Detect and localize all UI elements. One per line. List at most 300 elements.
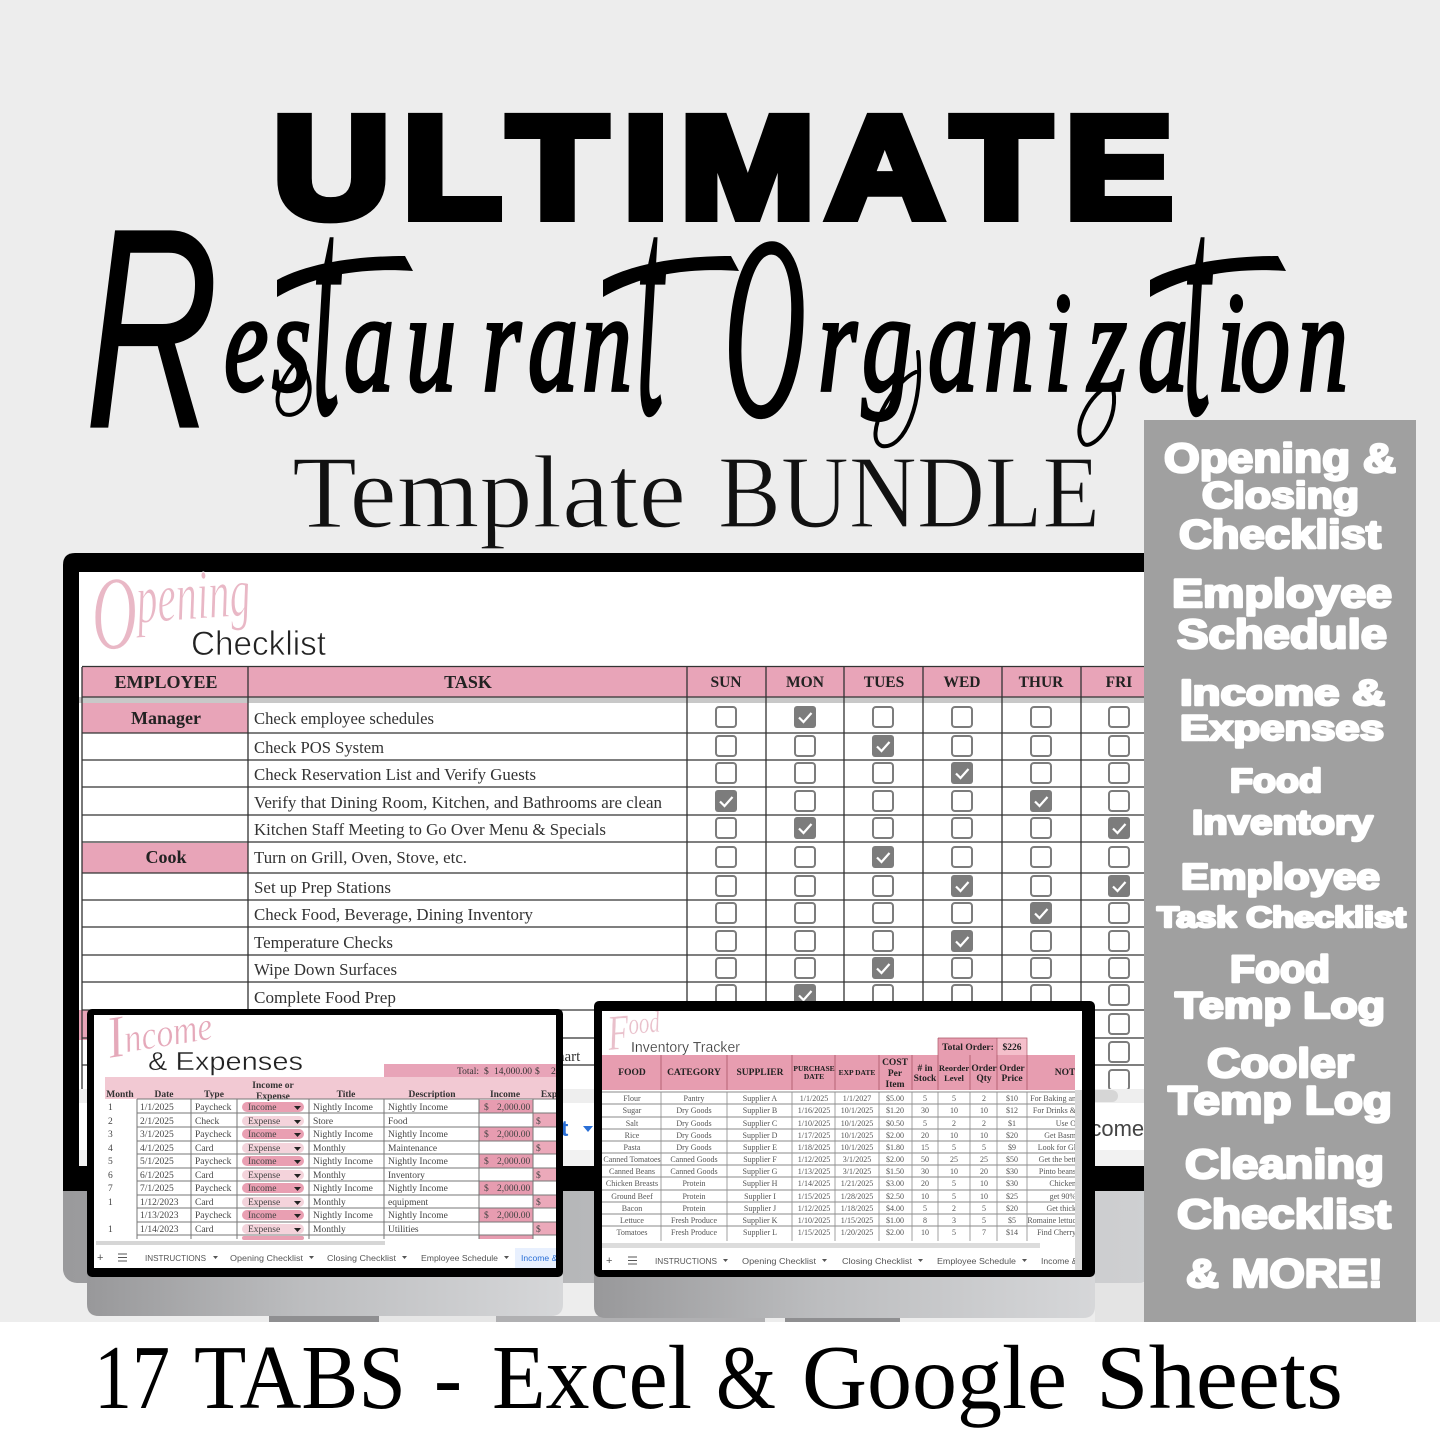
item: food inventory bbox=[1192, 762, 1373, 842]
inventory table: Pinto beans bbox=[1039, 1167, 1076, 1176]
income table: Date bbox=[154, 1090, 174, 1100]
inventory table: Supplier D bbox=[743, 1131, 778, 1140]
title: Restaurant Organization script: R bbox=[85, 168, 219, 487]
sheet tabs: Income & bbox=[521, 1253, 558, 1263]
income table: Expense bbox=[248, 1171, 280, 1181]
inventory table: 1/10/2025 bbox=[798, 1216, 830, 1225]
inventory table: $1.50 bbox=[886, 1167, 904, 1176]
checkboxes bbox=[715, 706, 1130, 1090]
inventory table: 1/15/2025 bbox=[798, 1192, 830, 1201]
inventory table: $4.00 bbox=[886, 1204, 904, 1213]
income table: Month bbox=[106, 1090, 134, 1100]
inventory table: 5 bbox=[952, 1179, 956, 1188]
income table: $ bbox=[536, 1197, 541, 1208]
inventory table: Supplier K bbox=[743, 1216, 778, 1225]
income table: Nightly Income bbox=[313, 1157, 373, 1167]
income table: Paycheck bbox=[195, 1184, 232, 1194]
income table: Monthly bbox=[313, 1171, 346, 1181]
income table: Paycheck bbox=[195, 1130, 232, 1140]
item: opening and closing checklist bbox=[1164, 435, 1396, 557]
income table: $ bbox=[536, 1224, 541, 1235]
inventory table: 5 bbox=[982, 1143, 986, 1152]
checklist table: WED bbox=[943, 674, 981, 691]
inventory table: 1/15/2025 bbox=[798, 1228, 830, 1237]
inventory table: Supplier G bbox=[743, 1167, 778, 1176]
sheet title: Income & Expenses bbox=[110, 1016, 302, 1076]
income table: Nightly Income bbox=[313, 1103, 373, 1113]
income table: Income bbox=[490, 1090, 520, 1100]
income table: $ bbox=[536, 1170, 541, 1181]
inventory table: 1/12/2025 bbox=[798, 1155, 830, 1164]
inventory table: Order bbox=[999, 1064, 1025, 1074]
income table: Expense bbox=[248, 1198, 280, 1208]
item: employee schedule bbox=[1172, 572, 1392, 657]
inventory table: 10 bbox=[950, 1167, 958, 1176]
inventory table: 3/1/2025 bbox=[843, 1155, 871, 1164]
monitor: food inventory tracker bbox=[594, 1001, 1144, 1323]
income table: Card bbox=[195, 1225, 214, 1235]
inventory table: 1/12/2025 bbox=[798, 1204, 830, 1213]
income table: Nightly Income bbox=[388, 1157, 448, 1167]
item: employee task checklist: Employee bbox=[1181, 856, 1380, 897]
title: Restaurant Organization script: ion bbox=[1217, 264, 1348, 421]
inventory table: Flour bbox=[623, 1094, 641, 1103]
totals bar: 14,000.00 bbox=[494, 1067, 532, 1077]
inventory table: 2 bbox=[952, 1119, 956, 1128]
inventory table: 5 bbox=[982, 1204, 986, 1213]
income table: 1/13/2023 bbox=[140, 1211, 179, 1221]
inventory table: 3 bbox=[952, 1216, 956, 1225]
income table: Paycheck bbox=[195, 1211, 232, 1221]
inventory table: 20 bbox=[921, 1131, 929, 1140]
item: income and expenses: Expenses bbox=[1180, 709, 1384, 748]
task list: Temperature Checks bbox=[254, 933, 393, 952]
income table: 7 bbox=[108, 1184, 113, 1194]
title: Restaurant Organization script bbox=[85, 137, 1348, 487]
income table: Paycheck bbox=[195, 1157, 232, 1167]
subtitle: Template BUNDLE: Template bbox=[292, 435, 686, 550]
income table: Income bbox=[248, 1184, 276, 1194]
item: food temp log: Food bbox=[1230, 949, 1330, 991]
inventory table: Use O bbox=[1056, 1119, 1076, 1128]
totals bar: $ bbox=[484, 1066, 489, 1077]
item: food temp log: Temp Log bbox=[1175, 985, 1385, 1026]
inventory table: $25 bbox=[1006, 1192, 1018, 1201]
inventory table: $1.00 bbox=[886, 1216, 904, 1225]
inventory table: Protein bbox=[682, 1192, 706, 1201]
inventory table: # in bbox=[917, 1064, 933, 1074]
sheet tabs bbox=[97, 1248, 558, 1268]
total order box: Total Order: bbox=[942, 1043, 994, 1053]
inventory table: Find Cherry bbox=[1037, 1228, 1076, 1237]
item: cleaning checklist: Cleaning bbox=[1185, 1141, 1384, 1187]
inventory table: Supplier E bbox=[743, 1143, 777, 1152]
inventory table: 5 bbox=[923, 1119, 927, 1128]
income table: 3 bbox=[108, 1130, 113, 1140]
income table: Card bbox=[195, 1144, 214, 1154]
inventory table: $5 bbox=[1008, 1216, 1016, 1225]
inventory table: $50 bbox=[1006, 1155, 1018, 1164]
inventory table: $12 bbox=[1006, 1106, 1018, 1115]
inventory table: Canned Goods bbox=[670, 1167, 718, 1176]
inventory table: 25 bbox=[950, 1155, 958, 1164]
subtitle: Template BUNDLE: BUNDLE bbox=[718, 435, 1100, 550]
inventory table: Canned Tomatoes bbox=[603, 1155, 661, 1164]
item: cooler temp log bbox=[1168, 1040, 1392, 1123]
task list: Verify that Dining Room, Kitchen, and Bathrooms are clean bbox=[254, 793, 662, 812]
item: cleaning checklist bbox=[1177, 1141, 1391, 1237]
inventory table: Per bbox=[888, 1069, 903, 1079]
screen bbox=[79, 572, 1145, 1166]
task list: Turn on Grill, Oven, Stove, etc. bbox=[254, 848, 467, 867]
sheet title: Food Inventory Tracker: Inventory Tracker bbox=[631, 1040, 740, 1056]
inventory table: Item bbox=[886, 1080, 905, 1090]
income table: 1 bbox=[108, 1225, 113, 1235]
inventory table: 2 bbox=[982, 1094, 986, 1103]
inventory table: Tomatoes bbox=[616, 1228, 648, 1237]
inventory table: 1/17/2025 bbox=[798, 1131, 830, 1140]
inventory table: 3/1/2025 bbox=[843, 1167, 871, 1176]
inventory table: 10 bbox=[980, 1179, 988, 1188]
footer text: - bbox=[434, 1327, 462, 1428]
inventory table: 10 bbox=[950, 1131, 958, 1140]
income table: Income or bbox=[252, 1081, 294, 1091]
income table: Monthly bbox=[313, 1225, 346, 1235]
inventory table: 1/10/2025 bbox=[798, 1119, 830, 1128]
inventory table: 5 bbox=[952, 1192, 956, 1201]
title: Restaurant Organization script: t bbox=[312, 137, 342, 480]
income table: Nightly Income bbox=[388, 1130, 448, 1140]
income table: 1 bbox=[108, 1198, 113, 1208]
income table: $ bbox=[484, 1102, 489, 1113]
footer text: & bbox=[716, 1327, 776, 1428]
income table: Income bbox=[248, 1130, 276, 1140]
inventory table: Pantry bbox=[684, 1094, 704, 1103]
income table: Expense bbox=[248, 1144, 280, 1154]
sheet title: Food Inventory Tracker: F bbox=[604, 1005, 632, 1062]
sheet tabs: Opening Checklist bbox=[742, 1256, 817, 1266]
inventory table: Supplier H bbox=[743, 1179, 778, 1188]
inventory table: Look for Gl bbox=[1038, 1143, 1077, 1152]
sheet tabs bbox=[606, 1256, 1075, 1266]
inventory table: 5 bbox=[982, 1216, 986, 1225]
income table: 6 bbox=[108, 1171, 113, 1181]
income table: Income bbox=[248, 1211, 276, 1221]
inventory table: $5.00 bbox=[886, 1094, 904, 1103]
income table: Monthly bbox=[313, 1198, 346, 1208]
income table: $ bbox=[536, 1116, 541, 1127]
sheet title: Food Inventory Tracker bbox=[608, 1011, 740, 1055]
sheet tabs: Closing Checklist bbox=[327, 1253, 397, 1263]
inventory table: $3.00 bbox=[886, 1179, 904, 1188]
income table: Expense bbox=[248, 1117, 280, 1127]
inventory table: 10/1/2025 bbox=[841, 1119, 873, 1128]
task list: Check employee schedules bbox=[254, 709, 434, 728]
income table: 1/1/2025 bbox=[140, 1103, 174, 1113]
income table: equipment bbox=[388, 1198, 428, 1208]
sheet title: Income & Expenses: I bbox=[101, 1003, 131, 1072]
title: Restaurant Organization script: auran bbox=[344, 264, 632, 421]
inventory table: Protein bbox=[682, 1204, 706, 1213]
item: employee schedule: Employee bbox=[1172, 572, 1392, 616]
income table: Income bbox=[248, 1103, 276, 1113]
inventory table: $0.50 bbox=[886, 1119, 904, 1128]
bezel bbox=[594, 1001, 1095, 1277]
inventory table: $1.20 bbox=[886, 1106, 904, 1115]
title: Restaurant Organization script: es bbox=[224, 264, 311, 421]
income table: Expense bbox=[256, 1092, 290, 1102]
subtitle: Template BUNDLE bbox=[292, 435, 1100, 550]
inventory table: Supplier I bbox=[744, 1192, 776, 1201]
inventory table: Romaine lettuc bbox=[1027, 1216, 1076, 1225]
income table: Utilities bbox=[388, 1225, 419, 1235]
income table: 2/1/2025 bbox=[140, 1117, 174, 1127]
income table: Card bbox=[195, 1198, 214, 1208]
checklist table: SUN bbox=[710, 674, 742, 691]
inventory table: FOOD bbox=[618, 1068, 646, 1078]
inventory table: 1/16/2025 bbox=[798, 1106, 830, 1115]
inventory table: Sugar bbox=[623, 1106, 642, 1115]
inventory table: 15 bbox=[921, 1143, 929, 1152]
inventory table: Supplier J bbox=[744, 1204, 776, 1213]
income table: Maintenance bbox=[388, 1144, 437, 1154]
checklist table: EMPLOYEE bbox=[114, 672, 218, 692]
income table: $ bbox=[536, 1143, 541, 1154]
inventory table: PURCHASE bbox=[793, 1064, 835, 1073]
item: opening and closing checklist: Closing bbox=[1202, 475, 1359, 516]
inventory table: DATE bbox=[804, 1072, 824, 1081]
inventory table: CATEGORY bbox=[667, 1068, 721, 1078]
inventory table: 1/18/2025 bbox=[798, 1143, 830, 1152]
income table bbox=[105, 1077, 557, 1240]
income table: Paycheck bbox=[195, 1103, 232, 1113]
inventory table: Ground Beef bbox=[611, 1192, 653, 1201]
sheet tabs: Employee Schedule bbox=[937, 1256, 1016, 1266]
inventory table: Fresh Produce bbox=[671, 1216, 717, 1225]
item: employee task checklist bbox=[1157, 856, 1406, 934]
inventory table: Fresh Produce bbox=[671, 1228, 717, 1237]
item: food inventory: Inventory bbox=[1192, 804, 1373, 842]
inventory table: Protein bbox=[682, 1179, 706, 1188]
checklist table: TASK bbox=[444, 672, 492, 692]
income table: Nightly Income bbox=[313, 1184, 373, 1194]
inventory table: 10 bbox=[980, 1131, 988, 1140]
checklist table: Cook bbox=[145, 847, 187, 867]
inventory table: Price bbox=[1001, 1074, 1023, 1084]
monitor bezel bbox=[63, 553, 1150, 1191]
item: opening and closing checklist: Opening & bbox=[1164, 435, 1396, 481]
monitor: large opening checklist bbox=[63, 546, 1153, 1283]
inventory table: SUPPLIER bbox=[737, 1068, 784, 1078]
inventory table: 1/15/2025 bbox=[841, 1216, 873, 1225]
inventory table: 7 bbox=[982, 1228, 986, 1237]
inventory table: 30 bbox=[921, 1106, 929, 1115]
item: food temp log bbox=[1175, 949, 1385, 1026]
income table: 4/1/2025 bbox=[140, 1144, 174, 1154]
inventory table: Bacon bbox=[622, 1204, 642, 1213]
totals bar: 2 bbox=[551, 1067, 556, 1077]
sheet chrome below table: Income bbox=[1072, 1116, 1144, 1141]
income table: 1/14/2023 bbox=[140, 1225, 179, 1235]
footer text: Excel bbox=[492, 1327, 692, 1428]
inventory table: 1/28/2025 bbox=[841, 1192, 873, 1201]
sheet chrome below table: hart bbox=[557, 1049, 581, 1065]
title: Restaurant Organization script: rganiza bbox=[818, 264, 1188, 421]
inventory table: Reorder bbox=[939, 1063, 969, 1073]
inventory table bbox=[602, 1055, 1077, 1241]
inventory table: $20 bbox=[1006, 1131, 1018, 1140]
sheet title: Opening Checklist: pening bbox=[131, 554, 253, 639]
task list bbox=[254, 709, 662, 1007]
task list: Check Reservation List and Verify Guests bbox=[254, 765, 536, 784]
monitor stand band bbox=[63, 1150, 1153, 1283]
income table: 2 bbox=[108, 1117, 113, 1127]
inventory table: 1/14/2025 bbox=[798, 1179, 830, 1188]
footer text: 17 bbox=[94, 1327, 170, 1428]
inventory table: 10 bbox=[921, 1228, 929, 1237]
income table: 5/1/2025 bbox=[140, 1157, 174, 1167]
total order box bbox=[938, 1038, 1027, 1055]
inventory table: 10/1/2025 bbox=[841, 1131, 873, 1140]
inventory table: Canned Goods bbox=[670, 1155, 718, 1164]
income table: 2,000.00 bbox=[497, 1211, 530, 1221]
inventory table: 1/20/2025 bbox=[841, 1228, 873, 1237]
income table: 3/1/2025 bbox=[140, 1130, 174, 1140]
sheet title: Opening Checklist: O bbox=[87, 554, 141, 673]
inventory table: Lettuce bbox=[620, 1216, 644, 1225]
inventory table: $20 bbox=[1006, 1204, 1018, 1213]
income table: Title bbox=[337, 1090, 355, 1100]
inventory table: Supplier F bbox=[743, 1155, 777, 1164]
inventory table: Order bbox=[971, 1064, 997, 1074]
inventory table: Rice bbox=[625, 1131, 640, 1140]
income table: 4 bbox=[108, 1144, 113, 1154]
title: Restaurant Organization script: t bbox=[1183, 137, 1213, 480]
income table: Check bbox=[195, 1117, 220, 1127]
inventory table: 1/13/2025 bbox=[798, 1167, 830, 1176]
inventory table: 2 bbox=[982, 1119, 986, 1128]
checklist table bbox=[79, 666, 1145, 1090]
title: Restaurant Organization script: O bbox=[724, 184, 806, 472]
inventory table: Salt bbox=[626, 1119, 639, 1128]
income table: Exp bbox=[541, 1090, 557, 1100]
task list: Set up Prep Stations bbox=[254, 878, 391, 897]
footer text: Sheets bbox=[1096, 1327, 1343, 1428]
inventory table: 1/18/2025 bbox=[841, 1204, 873, 1213]
inventory table: $30 bbox=[1006, 1167, 1018, 1176]
sheet chrome below table: t bbox=[561, 1116, 569, 1141]
inventory table: 10 bbox=[921, 1192, 929, 1201]
income table: 2,000.00 bbox=[497, 1130, 530, 1140]
inventory table: 10 bbox=[980, 1192, 988, 1201]
inventory table: Level bbox=[944, 1073, 965, 1083]
income table: 7/1/2025 bbox=[140, 1184, 174, 1194]
inventory table: 10 bbox=[950, 1106, 958, 1115]
inventory table: $2.00 bbox=[886, 1131, 904, 1140]
task list: Check POS System bbox=[254, 738, 384, 757]
sheet chrome below table bbox=[79, 1049, 1145, 1166]
income table: Nightly Income bbox=[313, 1211, 373, 1221]
income table: Store bbox=[313, 1117, 333, 1127]
item: cleaning checklist: Checklist bbox=[1177, 1191, 1391, 1237]
inventory table: 20 bbox=[921, 1179, 929, 1188]
item: and more: & MORE! bbox=[1186, 1252, 1383, 1296]
inventory table: COST bbox=[882, 1058, 909, 1068]
sheet tabs: Closing Checklist bbox=[842, 1256, 913, 1266]
inventory table: 5 bbox=[952, 1143, 956, 1152]
inventory table: Dry Goods bbox=[676, 1131, 712, 1140]
footer text bbox=[94, 1327, 1343, 1428]
income table: Inventory bbox=[388, 1171, 425, 1181]
income table: Income bbox=[248, 1157, 276, 1167]
inventory table: For Baking an bbox=[1030, 1094, 1076, 1103]
sheet title: Opening Checklist: Checklist bbox=[191, 625, 327, 663]
inventory table: Supplier B bbox=[743, 1106, 777, 1115]
inventory table: Canned Beans bbox=[609, 1167, 655, 1176]
income table: Nightly Income bbox=[388, 1211, 448, 1221]
totals bar: $ bbox=[535, 1066, 540, 1077]
panel: feature list sidebar bbox=[1144, 420, 1416, 1322]
sheet title: Opening Checklist bbox=[87, 546, 327, 673]
inventory table: Supplier C bbox=[743, 1119, 777, 1128]
stand bbox=[594, 1270, 1095, 1318]
inventory table: Qty bbox=[976, 1074, 992, 1084]
inventory table: Dry Goods bbox=[676, 1119, 712, 1128]
title: Restaurant Organization script: t bbox=[636, 137, 666, 480]
inventory table: Get the bett bbox=[1039, 1155, 1077, 1164]
income table: Description bbox=[409, 1090, 456, 1100]
income table: $ bbox=[484, 1210, 489, 1221]
item: employee task checklist: Task Checklist bbox=[1157, 902, 1406, 934]
scrollbar bbox=[96, 1241, 385, 1245]
task list: Complete Food Prep bbox=[254, 988, 396, 1007]
inventory table: 1/1/2025 bbox=[800, 1094, 828, 1103]
sheet title: Income & Expenses: ncome bbox=[121, 1004, 215, 1062]
inventory table: $2.00 bbox=[886, 1228, 904, 1237]
income table: $ bbox=[484, 1183, 489, 1194]
sheet tabs: INSTRUCTIONS bbox=[655, 1256, 717, 1266]
task list: Wipe Down Surfaces bbox=[254, 960, 397, 979]
income table: 1 bbox=[108, 1103, 113, 1113]
inventory table: $1 bbox=[1008, 1119, 1016, 1128]
item: employee schedule: Schedule bbox=[1177, 611, 1387, 657]
inventory table: 10 bbox=[980, 1106, 988, 1115]
footer text: Google bbox=[802, 1327, 1067, 1428]
inventory table: Get Basm bbox=[1044, 1131, 1077, 1140]
income table: 2,000.00 bbox=[497, 1184, 530, 1194]
inventory table: EXP DATE bbox=[839, 1068, 875, 1077]
inventory table: 20 bbox=[980, 1167, 988, 1176]
inventory table: 5 bbox=[923, 1094, 927, 1103]
sheet title: Income & Expenses: & Expenses bbox=[148, 1046, 303, 1076]
footer band bbox=[0, 1322, 1440, 1440]
inventory table: Dry Goods bbox=[676, 1143, 712, 1152]
scrollbar bbox=[602, 1243, 1040, 1248]
inventory table: Pasta bbox=[624, 1143, 641, 1152]
income table: Type bbox=[204, 1090, 224, 1100]
item: income and expenses bbox=[1180, 672, 1385, 748]
inventory table: $30 bbox=[1006, 1179, 1018, 1188]
inventory table: NOT bbox=[1055, 1068, 1076, 1078]
inventory table: Supplier A bbox=[743, 1094, 777, 1103]
inventory table: Chicken bbox=[1049, 1179, 1076, 1188]
item: opening and closing checklist: Checklist bbox=[1179, 513, 1381, 557]
inventory table: 50 bbox=[921, 1155, 929, 1164]
total order box: $226 bbox=[1002, 1042, 1022, 1053]
inventory table: 30 bbox=[921, 1167, 929, 1176]
income table: Card bbox=[195, 1171, 214, 1181]
income table: Expense bbox=[248, 1225, 280, 1235]
